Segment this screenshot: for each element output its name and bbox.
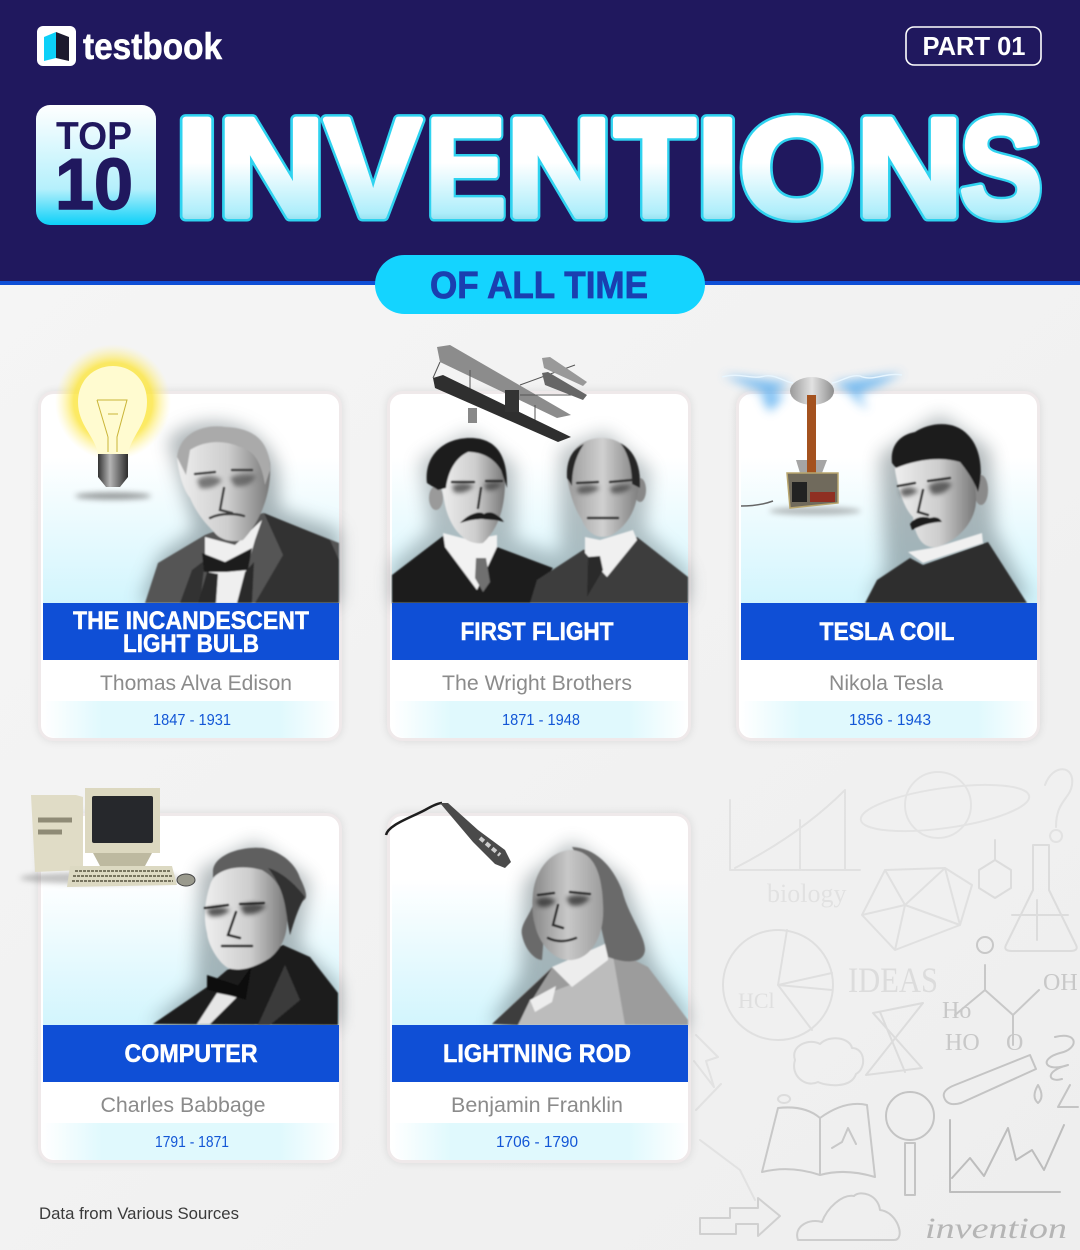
bulb glow (55, 344, 171, 460)
title face: I (696, 89, 739, 246)
cravat (530, 943, 608, 1012)
top 10 badge: TOP (56, 115, 132, 158)
portrait shadow (490, 842, 688, 1025)
card frame (737, 392, 1039, 740)
left moustache (460, 512, 504, 523)
lower wing (433, 375, 571, 442)
left brows and nose (452, 481, 502, 508)
doodle: benzene (979, 840, 1011, 898)
inventor name: Thomas Alva Edison (100, 672, 292, 695)
lower elevator (542, 372, 587, 400)
keyboard (67, 866, 177, 887)
coil cabinet (787, 473, 838, 508)
bulb filament (97, 400, 127, 452)
mouse (177, 874, 195, 886)
collar (908, 533, 983, 563)
left head (440, 442, 505, 543)
portrait: tesla (865, 415, 1030, 603)
upper wing (437, 345, 571, 418)
dates: 1871 - 1948 (502, 712, 580, 729)
bow tie (202, 548, 252, 572)
doodle: chemical formula: O (1006, 1030, 1023, 1056)
invention name: THE INCANDESCENT (73, 607, 309, 635)
dates: 1791 - 1871 (155, 1134, 229, 1151)
icon: light bulb (55, 344, 171, 500)
title face: N (506, 89, 612, 246)
coat front (518, 950, 625, 1025)
title band (43, 603, 339, 660)
doodle: planet (858, 772, 1032, 840)
portrait shadow (868, 415, 1030, 600)
title: inventions (176, 89, 1042, 246)
left jacket (392, 536, 553, 603)
title outline: N (506, 89, 612, 246)
icon: desktop computer (20, 788, 195, 887)
doodle: open book (762, 1104, 875, 1177)
icon: biplane (433, 345, 587, 442)
card: lightning rod (386, 803, 690, 1162)
part badge: PART 01 (922, 31, 1026, 61)
doodle: word invention: invention (925, 1212, 1067, 1245)
title outline: T (614, 89, 695, 246)
hair shadow (268, 868, 305, 935)
title face: V (325, 89, 421, 246)
eye sockets (197, 474, 256, 488)
title outline: N (856, 89, 963, 246)
dates: 1856 - 1943 (849, 712, 931, 729)
hair (892, 424, 981, 492)
portrait: franklin (490, 842, 688, 1025)
lightning glow (722, 373, 903, 412)
title outline: I (176, 89, 218, 246)
tower drives (38, 820, 72, 832)
top 10 badge (36, 105, 156, 225)
invention name: LIGHTNING ROD (443, 1040, 631, 1068)
date strip (43, 701, 339, 738)
hair (213, 848, 306, 935)
portrait shadow (392, 432, 688, 603)
head (205, 867, 287, 970)
doodle: question mark (1045, 769, 1072, 842)
left ear (429, 486, 443, 510)
card: first flight (388, 345, 690, 740)
ear (974, 475, 988, 505)
part badge (906, 27, 1041, 65)
rod shaft (440, 803, 511, 868)
portrait photo (145, 426, 339, 603)
eye sockets (900, 481, 952, 496)
rudder (468, 408, 477, 423)
card body (388, 392, 690, 740)
shirt (205, 520, 262, 603)
invention name: COMPUTER (124, 1040, 258, 1068)
date strip (43, 1123, 339, 1160)
portrait photo (392, 438, 688, 603)
portrait photo (865, 424, 1027, 603)
right shirt (585, 530, 637, 577)
title face: I (176, 89, 218, 246)
card body (40, 814, 340, 1162)
background (0, 280, 1080, 1250)
invention name: LIGHT BULB (123, 630, 259, 658)
facial features (195, 470, 252, 518)
inventor name: Benjamin Franklin (451, 1094, 623, 1117)
hair (177, 426, 270, 485)
rod cable (386, 803, 442, 835)
bulb glass (78, 366, 147, 454)
doodle: recycle arrows (694, 1035, 755, 1200)
icon: lightning rod (386, 803, 511, 868)
right ear (634, 478, 646, 502)
doodle: chemical formula: Ho (942, 998, 971, 1024)
date strip (392, 701, 688, 738)
vest (198, 562, 254, 603)
doodle: cloud (797, 1193, 900, 1240)
title outline: V (325, 89, 421, 246)
title band (392, 1025, 688, 1082)
engine (505, 390, 519, 412)
doodle: chemical formula: HO (945, 1030, 980, 1056)
card body (738, 392, 1038, 740)
jacket shading (180, 513, 339, 603)
doodle: molecule network (862, 868, 972, 950)
portrait photo (492, 847, 688, 1025)
title band (43, 1025, 339, 1082)
portrait: babbage (150, 842, 339, 1025)
logo wordmark: testbook (83, 26, 222, 67)
header blue rule (0, 281, 1080, 285)
title face: N (856, 89, 963, 246)
lightning arcs (722, 374, 902, 383)
subtitle pill: OF ALL TIME (430, 265, 648, 307)
title face: N (218, 89, 325, 246)
right features (577, 480, 632, 518)
coil capacitors (810, 492, 835, 502)
portrait shadow (150, 842, 339, 1025)
left eye sockets (452, 482, 502, 493)
jacket (153, 945, 338, 1025)
coil rod front (807, 455, 816, 473)
coil rod (807, 395, 816, 473)
doodle: pie chart (723, 930, 833, 1040)
logo tile (37, 26, 76, 66)
card: tesla coil (722, 373, 1039, 740)
doodle: chemical formula: OH (1043, 970, 1078, 996)
shirt (197, 993, 237, 1024)
dates: 1706 - 1790 (496, 1134, 578, 1151)
left hair (427, 438, 507, 490)
doodle: word ideas: IDEAS (848, 960, 938, 1000)
card body (388, 814, 690, 1162)
doodle: thought cloud (778, 1038, 863, 1103)
top 10 badge: 10 (55, 145, 133, 225)
doodle: flask (1005, 845, 1077, 951)
card frame (388, 392, 690, 740)
portrait backdrop (741, 395, 1037, 603)
jacket lapel (258, 965, 300, 1025)
doodle: growth chart: biology (767, 879, 846, 908)
portrait photo (153, 848, 338, 1025)
jacket (145, 513, 339, 603)
coat dark lapel (492, 968, 552, 1025)
head (177, 427, 270, 541)
portrait backdrop (43, 395, 339, 603)
invention name: TESLA COIL (820, 618, 954, 646)
upper elevator (542, 357, 587, 386)
coil wire (741, 501, 773, 506)
invention name: FIRST FLIGHT (460, 618, 614, 646)
head (895, 448, 976, 547)
date strip (392, 1123, 688, 1160)
facial features (538, 892, 590, 941)
doodle: chemical formula (942, 937, 1078, 1056)
doodle: hourglass (866, 1003, 923, 1075)
cravat (207, 965, 252, 1000)
title outline: S (960, 89, 1042, 246)
eye sockets (536, 895, 590, 907)
inventor name: Charles Babbage (100, 1094, 266, 1117)
title face: T (614, 89, 695, 246)
portrait backdrop (43, 817, 339, 1025)
icon: tesla coil (722, 373, 903, 515)
dates: 1847 - 1931 (153, 712, 231, 729)
title face: O (739, 89, 855, 246)
portrait backdrop (392, 395, 688, 603)
jacket (865, 542, 1027, 603)
right hair (567, 443, 640, 488)
right jacket (530, 537, 688, 603)
monitor screen (92, 796, 153, 843)
title outline: E (426, 89, 506, 246)
inventor name: The Wright Brothers (442, 672, 632, 695)
doodle: line chart (950, 1120, 1064, 1192)
date strip (741, 701, 1037, 738)
doodle: pie chart: HCl (738, 988, 775, 1013)
title outline: N (218, 89, 325, 246)
left tie (475, 558, 490, 592)
left shirt collar (443, 533, 497, 590)
title band (741, 603, 1037, 660)
brows and nose (898, 478, 950, 515)
portrait backdrop (392, 817, 688, 1025)
doodle: magnifier (886, 1092, 934, 1195)
inventor name: Nikola Tesla (829, 672, 943, 695)
coil disc (790, 377, 834, 405)
doodle: growth chart (730, 790, 860, 908)
right head (567, 438, 638, 537)
brows and nose (205, 903, 264, 946)
monitor stand (93, 853, 152, 866)
card frame (39, 392, 341, 740)
coil shadow (769, 507, 861, 515)
title outline: O (739, 89, 855, 246)
logo: testbook (37, 26, 222, 67)
subtitle pill (375, 255, 705, 314)
title face: E (426, 89, 506, 246)
struts (433, 362, 585, 425)
bulb base (98, 454, 128, 487)
header band (0, 0, 1080, 285)
doodle: arrow (700, 1198, 780, 1236)
portrait: wright brothers (392, 432, 688, 603)
hair (522, 847, 645, 961)
tower (31, 795, 83, 872)
invention name (73, 607, 309, 658)
desk shadow (20, 872, 180, 884)
portrait: edison (140, 423, 339, 603)
right eye sockets (577, 484, 632, 494)
head (532, 850, 603, 960)
source note: Data from Various Sources (39, 1204, 239, 1223)
right tie (587, 556, 603, 597)
card frame (388, 814, 690, 1162)
coat (492, 947, 688, 1025)
moustache (910, 517, 942, 530)
card body (40, 392, 340, 740)
coil dark panel (792, 482, 807, 502)
title face: S (960, 89, 1042, 246)
doodle: test tube (944, 1036, 1078, 1107)
portrait shadow (140, 423, 339, 603)
monitor (85, 788, 160, 853)
card frame (39, 814, 341, 1162)
title band (392, 603, 688, 660)
title outline: I (696, 89, 739, 246)
coil cone (796, 460, 827, 473)
background doodles (694, 769, 1078, 1245)
keyboard keys (72, 871, 173, 881)
bulb shadow (75, 492, 151, 500)
rod highlight (480, 838, 500, 855)
eye sockets (206, 903, 266, 916)
card: light bulb (39, 344, 341, 740)
card: computer (20, 788, 341, 1162)
